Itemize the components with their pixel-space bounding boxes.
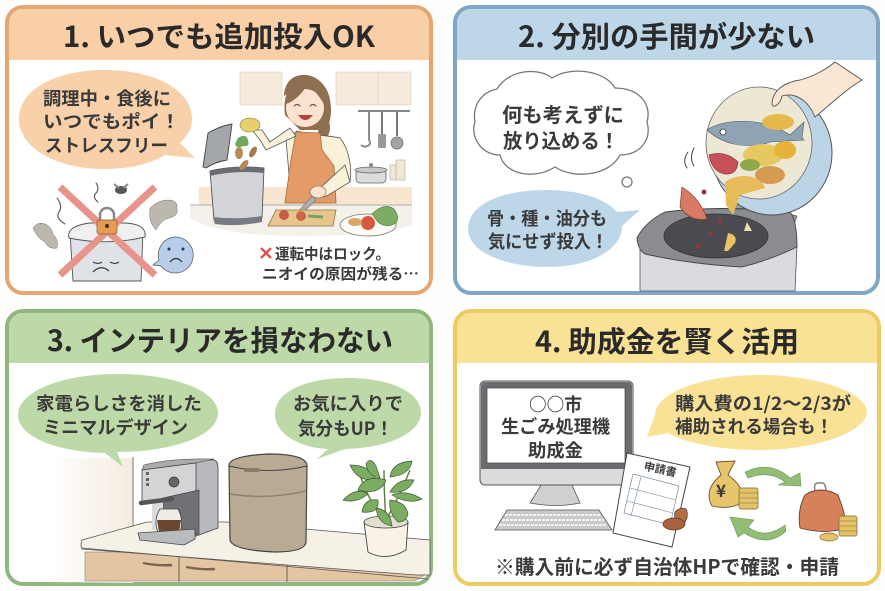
note: check with municipality: ※購入前に必ず自治体HPで確認・申請 xyxy=(495,551,839,580)
arrow: money to purse xyxy=(745,467,801,486)
icon: coffee machine xyxy=(138,459,218,545)
thought cloud xyxy=(474,71,648,187)
heading: panel 4: 4. 助成金を賢く活用 xyxy=(535,319,799,361)
panel: 3 interior xyxy=(7,311,431,584)
illustration: bowl of food scraps and hand xyxy=(680,62,862,251)
heading: panel 4 xyxy=(457,313,877,363)
speech bubble: bones and seeds: 気にせず投入！ xyxy=(488,228,608,254)
speech bubble: any time: 調理中・食後に xyxy=(43,85,171,111)
thought cloud: 放り込める！ xyxy=(503,125,619,154)
speech bubble: subsidy rate: 購入費の1/2〜2/3が xyxy=(675,390,851,416)
speech bubble: any time xyxy=(19,70,195,169)
arrow: purse to money xyxy=(730,517,786,540)
caption: drawback note: ニオイの原因が残る… xyxy=(262,263,419,284)
speech bubble: bones and seeds xyxy=(468,190,640,267)
heading: panel 2 xyxy=(457,9,876,60)
speech bubble: minimal design xyxy=(18,374,218,467)
icon: potted plant xyxy=(343,460,422,557)
illustration: woman cooking xyxy=(240,75,351,216)
illustration: kitchen background xyxy=(190,72,412,236)
illustration: computer with subsidy page: 助成金 xyxy=(528,437,583,463)
illustration: money bag and coins: ¥ xyxy=(716,477,726,502)
speech bubble: any time: ストレスフリー xyxy=(45,132,168,158)
illustration: locked bin with crossed out smell xyxy=(33,183,193,281)
illustration: kitchen counter with appliances xyxy=(50,454,430,583)
caption: drawback note: 運転中はロック。 xyxy=(275,243,390,264)
speech bubble: mood up xyxy=(275,378,421,459)
icon: beige food waste bin xyxy=(229,454,307,552)
illustration: application form and stamp: 申請書 xyxy=(643,458,678,480)
illustration: food waste bin open xyxy=(203,124,264,225)
speech bubble: mood up: 気分もUP！ xyxy=(298,415,393,441)
caption: drawback note xyxy=(261,243,419,284)
illustration: coin purse xyxy=(799,483,857,541)
speech bubble: minimal design: ミニマルデザイン xyxy=(43,414,188,440)
panel: 4 subsidy xyxy=(455,311,879,584)
heading: panel 1 xyxy=(9,9,429,60)
illustration: computer with subsidy page: 生ごみ処理機 xyxy=(501,413,610,439)
panel: 2 less sorting xyxy=(455,7,878,293)
heading: panel 2: 2. 分別の手間が少ない xyxy=(518,14,815,56)
illustration: food waste machine xyxy=(637,200,797,291)
speech bubble: subsidy rate: 補助される場合も！ xyxy=(675,413,833,439)
illustration: computer with subsidy page xyxy=(480,381,633,530)
heading: panel 1: 1. いつでも追加投入OK xyxy=(63,14,375,56)
speech bubble: subsidy rate xyxy=(647,375,867,450)
heading: panel 3: 3. インテリアを損なわない xyxy=(47,318,393,360)
speech bubble: mood up: お気に入りで xyxy=(293,390,403,416)
illustration: computer with subsidy page: ○○市 xyxy=(529,391,582,417)
illustration: application form and stamp xyxy=(613,453,690,547)
speech bubble: bones and seeds: 骨・種・油分も xyxy=(487,205,607,231)
illustration: money bag and coins xyxy=(709,461,758,509)
panel: 1 add anytime xyxy=(7,7,431,293)
speech bubble: minimal design: 家電らしさを消した xyxy=(36,390,202,416)
speech bubble: any time: いつでもポイ！ xyxy=(43,108,180,134)
illustration: cutting board and plate xyxy=(268,206,398,236)
thought cloud: 何も考えずに xyxy=(502,99,624,128)
